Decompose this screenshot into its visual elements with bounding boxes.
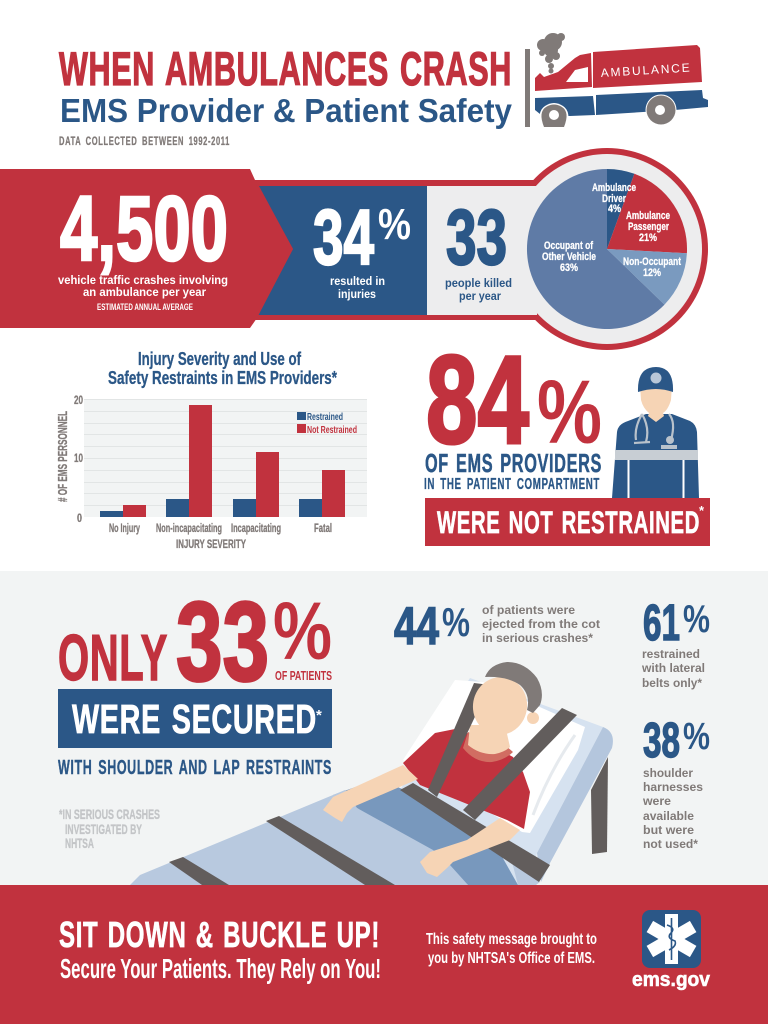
stat: 4,500 crashes: vehicle traffic crashes involving	[58, 273, 228, 287]
stat: 38% harnesses: 38	[643, 714, 680, 768]
banner: were secured	[58, 689, 332, 748]
bar chart: injury severity: Safety Restraints in EMS Providers*	[108, 368, 337, 388]
footnote: INVESTIGATED BY	[65, 822, 142, 837]
stat: 61% lateral belts: %	[683, 598, 710, 641]
stat: 44% ejected	[394, 597, 600, 656]
pie chart: 63%	[560, 262, 578, 274]
x axis labels: Non-incapacitating	[156, 521, 222, 535]
stat: only 33% of patients: OF PATIENTS	[275, 669, 332, 683]
pie chart: 4%	[608, 203, 621, 215]
stat: 44% ejected: of patients were	[482, 603, 575, 617]
stat: only 33% of patients: 33	[176, 579, 269, 704]
safety message	[426, 931, 597, 967]
stat: 61% lateral belts: with lateral	[641, 661, 705, 675]
stat: 33 killed	[445, 193, 512, 303]
stat: 38% harnesses: shoulder	[643, 766, 693, 780]
callout: 84% of EMS providers: 84	[426, 331, 529, 470]
panel: footer	[0, 885, 768, 1024]
icon: crashed ambulance	[535, 33, 708, 128]
callout: 84% of EMS providers: %	[537, 363, 602, 463]
stat: 61% lateral belts	[641, 594, 710, 690]
header	[59, 33, 708, 148]
panel: red arrow	[0, 169, 293, 328]
x axis labels: No Injury	[109, 521, 140, 535]
stat: 38% harnesses	[642, 714, 710, 851]
y axis labels	[56, 393, 83, 525]
x axis labels	[109, 521, 332, 551]
bars: restrained	[100, 499, 322, 517]
stat: 33 killed: per year	[459, 289, 501, 303]
stat: 38% harnesses: %	[683, 716, 710, 758]
stat: 34% injuries: %	[378, 200, 411, 249]
stat: 4,500 crashes: ESTIMATED ANNUAL AVERAGE	[97, 302, 193, 312]
pie chart: Ambulance	[626, 210, 670, 222]
stat: 34% injuries: injuries	[338, 287, 376, 301]
circle panel backing	[506, 148, 708, 350]
legend: Restrained	[307, 411, 343, 423]
stat: only 33% of patients: %	[273, 586, 332, 677]
stat: 44% ejected: 44	[394, 597, 439, 656]
y axis labels: # OF EMS PERSONNEL	[56, 411, 70, 502]
callout: 84% of EMS providers: OF EMS PROVIDERS	[425, 450, 602, 478]
stat: 61% lateral belts: restrained	[642, 647, 700, 661]
pie chart: 21%	[639, 232, 657, 244]
stat: 38% harnesses: but were	[643, 823, 694, 837]
x axis labels: INJURY SEVERITY	[176, 537, 246, 551]
icon: EMS provider figure	[612, 367, 699, 498]
footer headline: SIT DOWN & BUCKLE UP!	[59, 914, 380, 955]
title: WHEN AMBULANCES CRASH	[59, 42, 512, 95]
logo: star of life	[632, 910, 711, 991]
bar chart: injury severity	[56, 349, 367, 551]
safety message: you by NHTSA's Office of EMS.	[428, 950, 595, 967]
chart title: Injury Severity and Use of	[138, 349, 302, 369]
subheading: restraints: WITH SHOULDER AND LAP RESTRAINTS	[58, 756, 332, 779]
pie chart: Non-Occupant	[623, 256, 681, 268]
pie chart	[527, 169, 687, 329]
pie chart: Occupant of	[544, 240, 593, 252]
panel: injuries blue	[258, 186, 427, 315]
stat: 4,500 crashes: an ambulance per year	[83, 285, 206, 299]
data range note: DATA COLLECTED BETWEEN 1992-2011	[59, 134, 230, 148]
subtitle: EMS Provider & Patient Safety	[60, 92, 513, 129]
stat: 38% harnesses: available	[643, 809, 694, 823]
stat: 61% lateral belts: belts only*	[642, 676, 702, 690]
stat: only 33% of patients: ONLY	[58, 621, 168, 694]
panel: statistics band	[0, 148, 708, 350]
stat: 33 killed: people killed	[445, 276, 512, 290]
pie chart: Other Vehicle	[542, 251, 596, 263]
stat: 61% lateral belts: 61	[643, 594, 680, 651]
stat: 4,500 crashes: 4,500	[60, 178, 228, 280]
y axis labels: 0	[77, 511, 82, 525]
legend: Not Restrained	[307, 424, 357, 436]
stat: 34% injuries: resulted in	[330, 274, 385, 288]
y axis labels: 10	[74, 451, 83, 465]
banner: were secured: WERE SECURED	[72, 696, 317, 742]
icon: crashed ambulance: AMBULANCE	[600, 61, 690, 80]
safety message: This safety message brought to	[426, 931, 597, 948]
stat: 33 killed: 33	[446, 193, 507, 281]
stat: only 33% of patients	[58, 579, 332, 704]
stat: 44% ejected: in serious crashes*	[482, 631, 593, 645]
footer tagline: Secure Your Patients. They Rely on You!	[60, 953, 381, 984]
footnote: *IN SERIOUS CRASHES	[59, 807, 160, 822]
x axis labels: Fatal	[314, 521, 332, 535]
banner: were not restrained	[425, 498, 710, 546]
panel: patient section	[0, 571, 768, 885]
callout: 84% of EMS providers: IN THE PATIENT COMPARTMENT	[424, 476, 600, 493]
stat: 34% injuries: 34	[313, 193, 374, 281]
pie chart: Driver	[602, 193, 627, 205]
callout: 84% of EMS providers	[424, 331, 710, 546]
footnote: NHTSA	[65, 836, 94, 851]
stat: 38% harnesses: harnesses	[643, 780, 703, 794]
stat: 4,500 crashes	[58, 178, 228, 312]
y axis labels: 20	[74, 393, 83, 407]
pie chart: Ambulance	[592, 182, 636, 194]
banner: were secured: *	[316, 707, 322, 724]
stat: 44% ejected: %	[442, 599, 470, 645]
bars: not restrained	[123, 405, 345, 517]
x axis labels: Incapacitating	[231, 521, 281, 535]
footnote	[59, 807, 160, 851]
stat: 38% harnesses: were	[642, 794, 671, 808]
stat: 38% harnesses: not used*	[643, 837, 698, 851]
legend	[297, 411, 357, 436]
banner: were not restrained: *	[699, 503, 705, 518]
illustration: patient on cot	[130, 662, 613, 885]
pie chart: Passenger	[628, 221, 670, 233]
stat: 44% ejected: ejected from the cot	[482, 617, 600, 631]
pie chart: 12%	[643, 267, 661, 279]
logo: star of life: ems.gov	[632, 969, 711, 991]
